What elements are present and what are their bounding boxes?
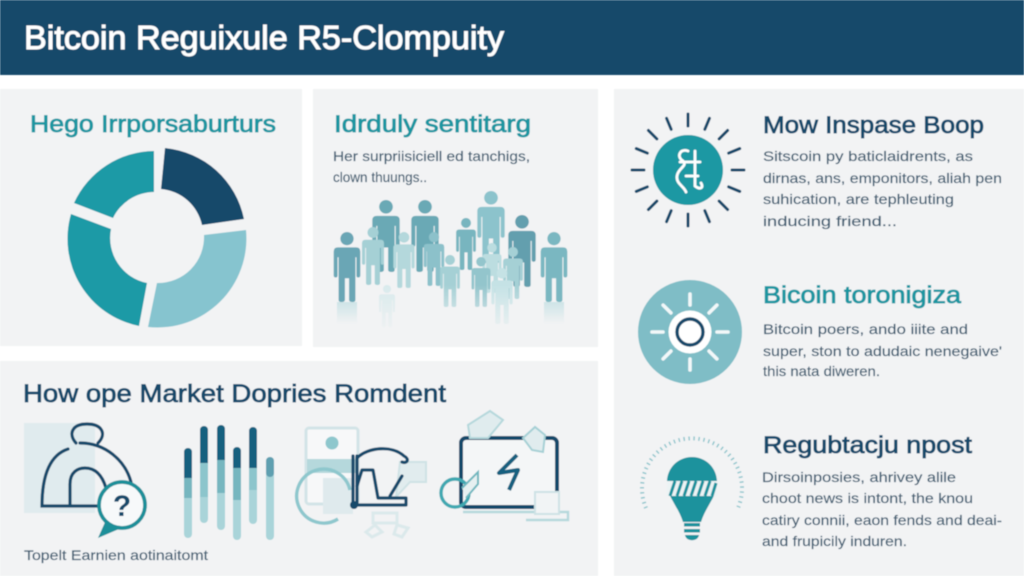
panel: market: [0, 361, 598, 576]
panel: right column: [614, 89, 1024, 576]
icon: document and tools: [297, 428, 426, 537]
inspire text: Sitscoin py baticlaidrents, as: [763, 148, 973, 164]
header banner: [0, 0, 1024, 75]
heading: regulation: Regubtacju npost: [763, 432, 972, 459]
crowd panel text: clown thuungs..: [333, 169, 427, 185]
block: inspire: [632, 112, 1002, 229]
icon: tablet with hands: [441, 411, 568, 520]
inspire text: inducing friend...: [763, 213, 897, 229]
heading: inspire: Mow Inspase Boop: [763, 112, 984, 139]
panel: crowd: [313, 89, 598, 347]
icon: light bulb: [642, 438, 742, 540]
regulation text: choot news is intont, the knou: [762, 490, 973, 506]
regulation text: and frupicily induren.: [762, 533, 907, 549]
crowd panel text: Her surpriisiciell ed tanchigs,: [333, 148, 530, 164]
market caption: Topelt Earnien aotinaitomt: [24, 547, 208, 563]
icon: pale sun disc: [638, 280, 742, 384]
heading: donut panel: Hego Irrporsaburturs: [30, 111, 276, 138]
inspire text: [763, 148, 1002, 229]
bitcoin text: [763, 321, 1002, 379]
panel: donut chart: [0, 89, 302, 346]
heading: market panel: How ope Market Dopries Romdent: [23, 380, 446, 408]
icon: sun coin: [632, 114, 744, 226]
bar chart: [184, 425, 274, 540]
inspire text: suhication, are tephleuting: [763, 191, 954, 207]
title: Bitcoin Reguixule R5-Clompuity: [24, 19, 505, 56]
bitcoin text: super, ston to adudaic nenegaive': [763, 343, 1002, 359]
icon: crowd of people: [334, 191, 567, 335]
icon: bell with question bubble: ?: [113, 490, 131, 523]
bitcoin text: this nata diweren.: [763, 363, 880, 379]
inspire text: dirnas, ans, emponitors, aliah pen: [763, 170, 1002, 186]
icon: bell with question bubble: [24, 423, 145, 538]
bitcoin text: Bitcoin poers, ando iiite and: [763, 321, 968, 337]
donut chart: [67, 148, 246, 327]
regulation text: catiry connii, eaon fends and deai-: [762, 512, 1002, 528]
regulation text: Dirsoinposies, ahrivey alile: [762, 469, 956, 485]
crowd panel text: [333, 148, 530, 185]
block: bitcoin: [638, 280, 1002, 384]
heading: bitcoin: Bicoin toronigiza: [763, 282, 962, 309]
heading: crowd panel: Idrduly sentitarg: [334, 111, 531, 138]
regulation text: [762, 469, 1002, 549]
block: regulation: [642, 432, 1002, 549]
